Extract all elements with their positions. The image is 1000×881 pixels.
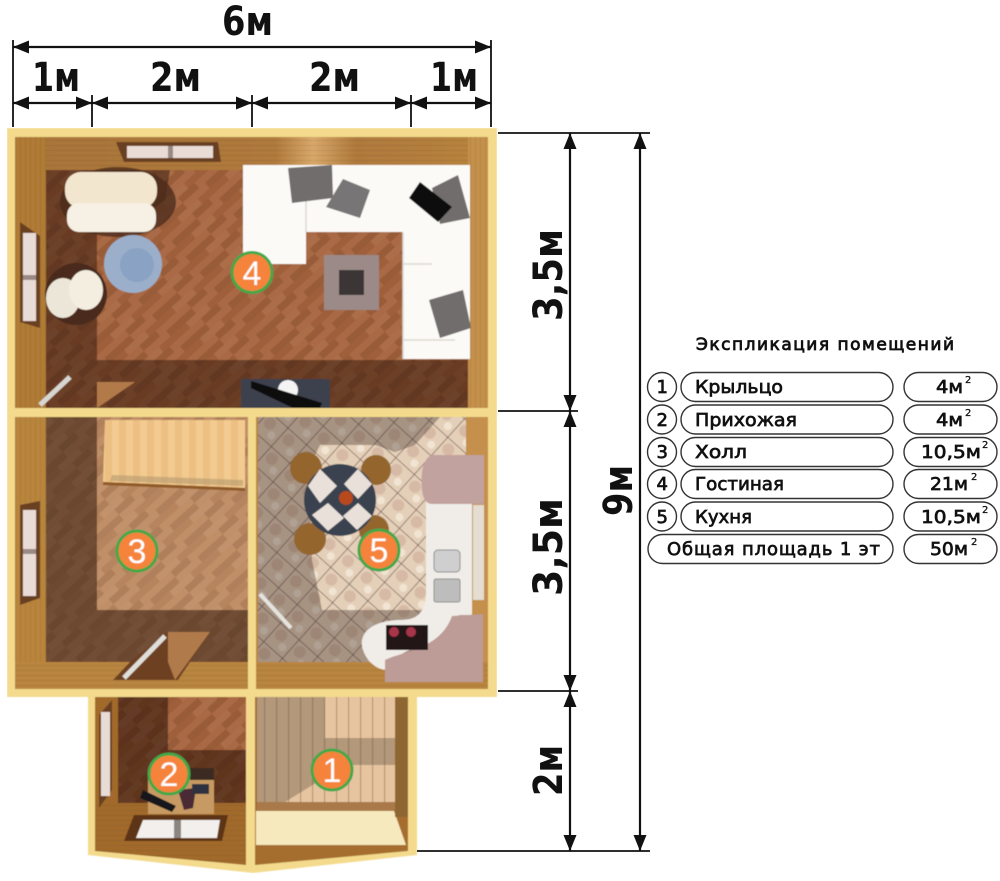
total row: Общая площадь 1 эт [667, 539, 880, 560]
badge 2 [149, 754, 189, 794]
row 1: Крыльцо [695, 377, 783, 398]
row 3: 3 [656, 442, 668, 463]
row 2 [648, 405, 997, 434]
badge 5: 5 [370, 532, 388, 570]
row 2: 2 [965, 408, 971, 419]
badge 3 [117, 531, 157, 571]
badge 1: 1 [323, 752, 341, 790]
row 2: 2 [656, 410, 668, 431]
window: hall [20, 501, 40, 605]
total row [648, 534, 997, 564]
label: 2 m: 2м [309, 55, 360, 101]
armchair [45, 263, 107, 325]
row 3: Холл [695, 442, 747, 463]
row 3: 2 [982, 440, 988, 451]
horizontal dimensions [13, 40, 491, 127]
row 2: 4м [936, 410, 963, 431]
hatch door [113, 632, 210, 680]
row 2: Прихожая [695, 410, 797, 431]
door [260, 594, 291, 628]
panel: porch [255, 697, 408, 865]
total row: 2 [971, 537, 977, 548]
window: entrance side [99, 700, 112, 808]
panel: entrance hall [95, 697, 246, 865]
window: left wall [20, 222, 40, 328]
main house outer walls [7, 128, 497, 697]
staircase [103, 420, 245, 491]
label: 9 m: 9м [596, 465, 642, 516]
window: top wall [116, 142, 221, 162]
badge 2: 2 [160, 756, 178, 794]
badge 3: 3 [128, 533, 146, 571]
panel: hall [15, 417, 248, 689]
label: 1 m right: 1м [430, 55, 478, 101]
badge 5 [359, 530, 399, 570]
row 1: 2 [965, 375, 971, 386]
dining table [290, 452, 391, 555]
total row: 50м [930, 539, 968, 560]
badge 4 [232, 252, 272, 293]
row 1 [648, 372, 997, 402]
label: 6 m: 6м [222, 0, 273, 45]
wall: centre partition [248, 417, 256, 697]
row 5: 10,5м [921, 507, 981, 528]
floor plan [7, 128, 497, 873]
label: 3,5 m upper: 3,5м [526, 229, 572, 321]
panel: room schedule [648, 335, 997, 564]
row 4: Гостиная [695, 474, 784, 495]
round glass table [104, 235, 162, 293]
row 1: 4м [936, 377, 963, 398]
desk with items [140, 768, 214, 814]
coffee table [324, 255, 379, 310]
wall: porch partition [246, 697, 255, 869]
door [40, 377, 70, 405]
panel: kitchen [256, 417, 488, 689]
row 4 [648, 470, 997, 498]
row 5 [648, 502, 997, 531]
row 1: 1 [656, 377, 668, 398]
row 4: 4 [656, 474, 668, 495]
loveseat [60, 167, 176, 237]
label: 3,5 m lower: 3,5м [526, 498, 572, 596]
vertical dimensions [417, 133, 650, 851]
label: 2 m vertical: 2м [526, 745, 572, 796]
row 3 [648, 438, 997, 466]
row 5: 5 [656, 507, 668, 528]
label: 2 m: 2м [150, 55, 201, 101]
row 5: 2 [982, 505, 988, 516]
row 4: 21м [930, 474, 968, 495]
row 3: 10,5м [921, 442, 981, 463]
label: 1 m left: 1м [32, 55, 80, 101]
badge 1 [312, 750, 352, 790]
row 4: 2 [971, 472, 977, 483]
TV stand [241, 379, 330, 408]
porch outer walls [88, 694, 417, 873]
panel: living room [15, 137, 488, 408]
window: floor [124, 815, 228, 841]
corner sofa [243, 165, 471, 359]
row 5: Кухня [695, 507, 752, 528]
kitchen counter [362, 455, 484, 682]
badge 4: 4 [243, 255, 261, 293]
heading: Экспликация помещений [696, 335, 954, 355]
